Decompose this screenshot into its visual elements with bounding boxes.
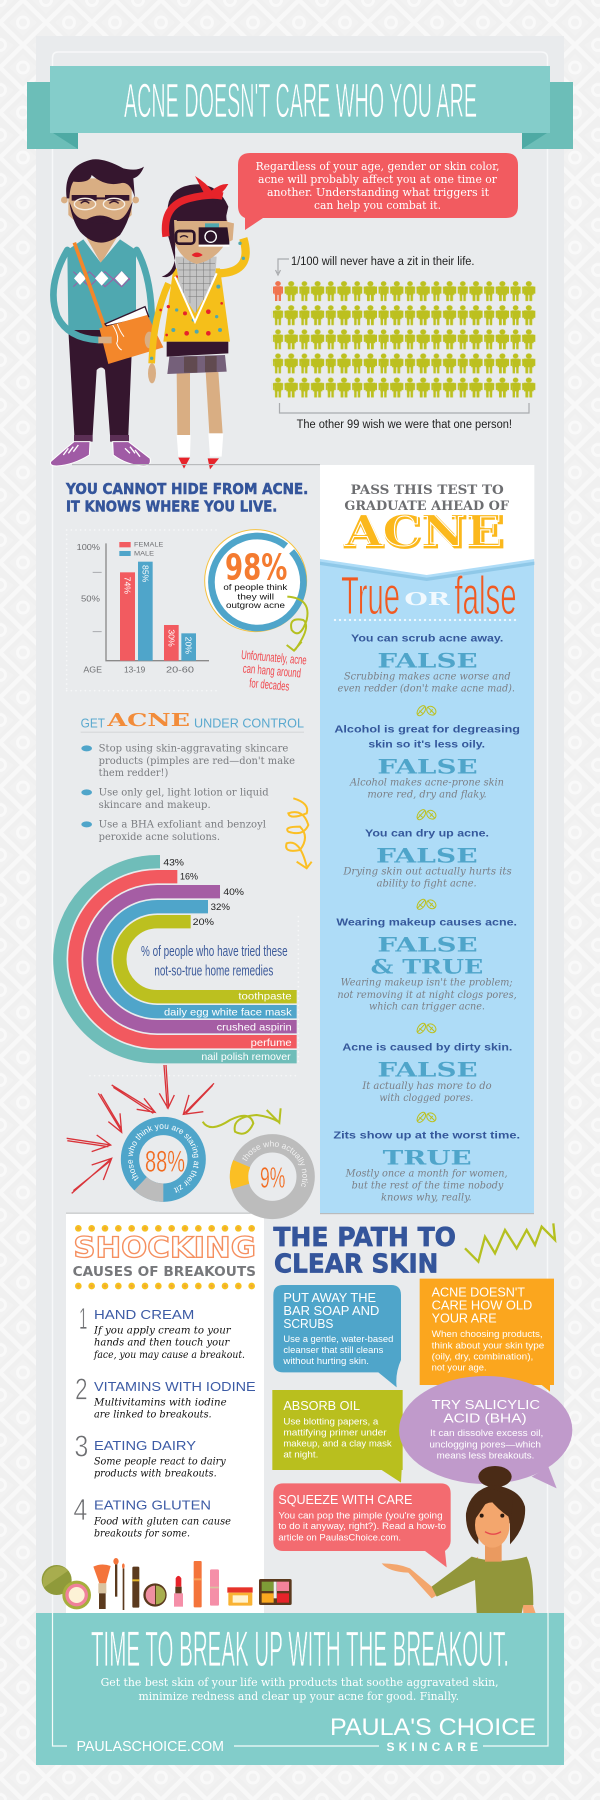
- quiz header: [320, 465, 534, 581]
- bar chart: 100%: [77, 542, 100, 552]
- tips list: them redder!): [99, 767, 168, 779]
- intro speech bubble: acne will probably affect you at one time or: [258, 173, 498, 186]
- tip: blue bubble: cleanser that still cleans: [283, 1345, 384, 1355]
- radial bar chart: [60, 862, 297, 1057]
- sketch arrows: [67, 1065, 214, 1193]
- causes list: breakouts for some.: [94, 1528, 190, 1540]
- heading: you cannot hide: [65, 481, 308, 515]
- handwritten note: [241, 648, 307, 694]
- quiz questions upper: false: [454, 567, 517, 626]
- bar chart: 85%: [140, 565, 150, 583]
- subheading: CAUSES OF BREAKOUTS: [73, 1265, 256, 1280]
- grid of 100 people: [271, 279, 535, 400]
- ribbon folds: [53, 133, 547, 149]
- heading: you cannot hide: IT KNOWS WHERE YOU LIVE.: [66, 498, 277, 515]
- footer text: minimize redness and clear up your acne for good. Finally.: [138, 1690, 459, 1703]
- 98% donut callout: 98%: [225, 547, 287, 588]
- quiz questions lower: Wearing makeup causes acne.: [336, 917, 517, 928]
- intro speech bubble: another. Understanding what triggers it: [267, 186, 490, 199]
- highlighted person: [272, 280, 284, 302]
- quiz questions upper: Scrubbing makes acne worse and: [344, 672, 511, 683]
- logo: PAULA'S CHOICE: [330, 1714, 536, 1741]
- chart labels: [164, 992, 293, 1063]
- tips list: Stop using skin-aggravating skincare: [99, 743, 288, 755]
- panel: true or false quiz: [320, 465, 534, 1214]
- quiz questions lower: FALSE: [376, 845, 478, 868]
- tip: blue bubble: without hurting skin.: [282, 1356, 369, 1366]
- tip: lime box: Use blotting papers, a: [283, 1416, 378, 1426]
- chart percentages: [163, 858, 244, 927]
- tip: orange box: ACNE DOESN'T: [432, 1285, 525, 1300]
- tips list: products (pimples are red—don't make: [99, 755, 295, 767]
- quiz questions lower: FALSE: [377, 934, 478, 957]
- tip: orange box: YOUR ARE: [432, 1311, 497, 1326]
- causes list: products with breakouts.: [94, 1468, 217, 1480]
- causes list: are linked to breakouts.: [94, 1409, 212, 1421]
- bar chart: MALE: [134, 551, 155, 558]
- 9% donut: [230, 1134, 315, 1220]
- tip: red bubble: You can pop the pimple (you're going: [278, 1510, 443, 1520]
- bracket: [280, 403, 529, 413]
- quiz questions lower: Drying skin out actually hurts its: [342, 867, 512, 878]
- bar chart: 20-60: [166, 665, 194, 675]
- logo: [330, 1714, 536, 1754]
- bar chart: 30%: [166, 629, 176, 647]
- tip: orange box: not your age.: [432, 1362, 487, 1372]
- pictogram caption top: 1/100 will never have a zit in their life.: [291, 256, 474, 268]
- chart labels: perfume: [251, 1038, 292, 1049]
- footer: [36, 1613, 564, 1765]
- left column upper: [65, 481, 312, 868]
- makeup illustration: [42, 1558, 292, 1610]
- causes list: Multivitamins with iodine: [93, 1397, 227, 1409]
- bar chart: [77, 542, 209, 675]
- woman presenting: [382, 1466, 536, 1613]
- pictogram caption bottom: The other 99 wish we were that one person!: [297, 419, 512, 431]
- chart caption: not-so-true home remedies: [154, 963, 273, 979]
- quiz questions lower: FALSE: [377, 1059, 478, 1082]
- causes list: hands and then touch your: [94, 1337, 230, 1349]
- quiz questions upper: Alcohol is great for degreasing: [334, 725, 520, 736]
- tips list: [81, 743, 295, 843]
- chart percentages: 40%: [223, 887, 244, 897]
- section divider: [72, 464, 320, 465]
- bar chart: 50%: [81, 594, 100, 604]
- 1 in 100 pictogram: [271, 256, 535, 431]
- chart percentages: 16%: [180, 872, 198, 882]
- heading: get acne under control: [81, 711, 304, 733]
- panel: shocking causes: [42, 1213, 292, 1614]
- chart percentages: 20%: [193, 917, 214, 927]
- chart labels: nail polish remover: [201, 1052, 291, 1063]
- shocking heading: SHOCKING: [73, 1230, 256, 1264]
- content panel: [36, 36, 564, 1614]
- quiz questions upper: You can scrub acne away.: [351, 634, 503, 645]
- quiz questions upper: True: [341, 567, 400, 626]
- chart labels: daily egg white face mask: [164, 1008, 293, 1019]
- tip: red bubble: to do it anyway, right?). Read a how-to: [278, 1521, 446, 1531]
- tips list: peroxide acne solutions.: [99, 831, 220, 843]
- url: PAULASCHOICE.COM: [76, 1738, 224, 1755]
- 9% donut: those who actually notice: [242, 1140, 308, 1187]
- title ribbon: [27, 66, 573, 149]
- handwritten note: for decades: [249, 676, 290, 694]
- chart labels: crushed aspirin: [217, 1023, 292, 1034]
- tip: red bubble: [273, 1483, 451, 1567]
- footer frame lines: [52, 1613, 548, 1746]
- panel: path to clear skin: [272, 1223, 572, 1613]
- tip: purple bubble: TRY SALICYLIC: [432, 1397, 540, 1412]
- man: [50, 159, 163, 466]
- tip: lime box: mattifying primer under: [283, 1427, 387, 1437]
- quiz header: GRADUATE AHEAD OF: [344, 498, 510, 514]
- yellow squiggle arrow: [286, 798, 312, 868]
- ribbon band: [50, 66, 550, 133]
- 98% donut callout: [205, 530, 307, 632]
- quiz questions lower: but the rest of the time nobody: [352, 1181, 504, 1192]
- 98% donut callout: of people think: [223, 582, 288, 592]
- chart percentages: 32%: [211, 902, 230, 912]
- heading: THE PATH TO: [273, 1223, 456, 1253]
- causes list: 4: [73, 1493, 87, 1527]
- chart caption: % of people who have tried these: [141, 944, 288, 960]
- tip: red bubble: SQUEEZE WITH CARE: [278, 1492, 413, 1507]
- causes list: Some people react to dairy: [94, 1455, 226, 1467]
- heading: get acne under control: GET: [81, 716, 105, 730]
- tip: orange box: CARE HOW OLD: [432, 1298, 532, 1313]
- tip: purple bubble: [399, 1376, 572, 1488]
- tip: purple bubble: means less breakouts.: [437, 1450, 534, 1460]
- causes list: EATING DAIRY: [94, 1438, 196, 1453]
- bar chart: 13-19: [124, 665, 146, 675]
- footer band: [36, 1613, 564, 1765]
- quiz header: ACNE: [344, 507, 505, 558]
- causes list: EATING GLUTEN: [94, 1498, 211, 1513]
- quiz questions upper: skin so it's less oily.: [368, 739, 485, 750]
- quiz questions lower: Zits show up at the worst time.: [333, 1130, 520, 1141]
- green swirl arrow: [287, 597, 308, 651]
- tip: orange box: [420, 1279, 554, 1392]
- handwritten note: Unfortunately, acne: [241, 648, 307, 668]
- chart percentages: 43%: [163, 858, 184, 868]
- quiz questions lower: TRUE: [383, 1147, 472, 1170]
- quiz questions upper: more red, dry and flaky.: [367, 790, 487, 801]
- quiz questions lower: ability to fight acne.: [377, 879, 477, 890]
- tip: purple bubble: ACID (BHA): [443, 1410, 527, 1425]
- bar chart: 74%: [122, 577, 132, 594]
- quiz questions upper: OR: [404, 589, 452, 610]
- tips list: skincare and makeup.: [99, 799, 211, 811]
- intro speech bubble: [238, 153, 518, 230]
- quiz questions lower: Mostly once a month for women,: [345, 1169, 508, 1180]
- handwritten note: can hang around: [242, 661, 302, 681]
- quiz questions lower: Wearing makeup isn't the problem;: [341, 978, 513, 989]
- chart labels: toothpaste: [238, 992, 292, 1003]
- heading: you cannot hide: YOU CANNOT HIDE FROM ACNE.: [65, 481, 308, 498]
- quiz questions lower: knows why, really.: [381, 1193, 472, 1204]
- tip: orange box: When choosing products,: [432, 1329, 543, 1339]
- quiz questions upper: FALSE: [377, 755, 478, 778]
- causes list: 1: [79, 1302, 87, 1336]
- heading: CLEAR SKIN: [274, 1250, 438, 1280]
- quiz questions upper: [334, 567, 520, 840]
- causes list: 2: [75, 1372, 88, 1406]
- tip: purple bubble: unclogging pores—which: [429, 1439, 541, 1449]
- 88% donut: 88%: [145, 1146, 185, 1179]
- quiz questions upper: FALSE: [377, 649, 478, 672]
- pointer arrow: [276, 259, 289, 275]
- inner white frame: [52, 52, 548, 1614]
- 88% donut: those who think you are staring at their zit: [128, 1124, 198, 1193]
- quiz questions lower: [333, 845, 520, 1204]
- tips list: Use a BHA exfoliant and benzoyl: [99, 819, 266, 831]
- tip: lime box: makeup, and a clay mask: [283, 1438, 392, 1448]
- donuts: perception versus reality: [120, 1116, 315, 1220]
- 98% donut callout: outgrow acne: [226, 600, 285, 610]
- lemon dot rows: [78, 1228, 253, 1286]
- heading: get acne under control: UNDER CONTROL: [194, 716, 304, 730]
- dotted frame: [90, 917, 300, 1076]
- bar chart: 20%: [184, 637, 194, 654]
- quiz questions lower: & TRUE: [371, 955, 483, 978]
- intro speech bubble: Regardless of your age, gender or skin color,: [256, 160, 500, 173]
- logo: SKINCARE: [386, 1740, 478, 1754]
- causes list: face, you may cause a breakout.: [93, 1349, 245, 1361]
- tip: blue bubble: SCRUBS: [283, 1316, 334, 1331]
- causes list: 3: [74, 1430, 88, 1464]
- tips list: Use only gel, light lotion or liquid: [99, 787, 269, 799]
- 9% donut: 9%: [260, 1162, 285, 1194]
- heading: [273, 1223, 456, 1280]
- quiz questions upper: even redder (don't make acne mad).: [338, 684, 515, 695]
- tip: red bubble: article on PaulasChoice.com.: [278, 1532, 401, 1542]
- 98% donut callout: they will: [237, 591, 274, 601]
- tip: lime box: at night.: [283, 1449, 318, 1459]
- tip: purple bubble: It can dissolve excess oil,: [430, 1428, 543, 1438]
- causes list: VITAMINS WITH IODINE: [94, 1379, 256, 1394]
- quiz header: PASS THIS TEST TO: [351, 482, 504, 498]
- lime zigzag: [465, 1223, 555, 1262]
- causes list: [73, 1302, 256, 1540]
- tip: blue bubble: [273, 1285, 401, 1387]
- heading: get acne under control: ACNE: [106, 711, 190, 731]
- quiz questions lower: with clogged pores.: [379, 1093, 473, 1104]
- dotted frame: [67, 530, 220, 691]
- tip: orange box: (oily, dry, combination),: [432, 1351, 533, 1361]
- footer text: [101, 1676, 499, 1703]
- chart caption: [141, 944, 288, 979]
- lime swirl arrow: [203, 1108, 281, 1134]
- left column lower: [60, 858, 300, 1193]
- causes list: If you apply cream to your: [93, 1325, 232, 1337]
- quiz questions lower: not removing it at night clogs pores,: [337, 990, 517, 1001]
- ribbon tails: [27, 82, 573, 149]
- footer text: Get the best skin of your life with products that soothe aggravated skin,: [101, 1676, 499, 1689]
- bar chart: AGE: [83, 665, 102, 675]
- intro speech bubble: can help you combat it.: [314, 199, 441, 212]
- tip: blue bubble: PUT AWAY THE: [283, 1290, 376, 1305]
- quiz questions lower: It actually has more to do: [361, 1081, 492, 1092]
- causes list: Food with gluten can cause: [93, 1516, 231, 1528]
- tip: blue bubble: Use a gentle, water-based: [283, 1334, 393, 1344]
- quiz header: ACNE: [344, 505, 502, 556]
- tip: lime box: [272, 1390, 403, 1483]
- characters: hipster man and woman: [50, 159, 246, 469]
- woman with camera: [148, 176, 246, 469]
- quiz questions upper: Alcohol makes acne-prone skin: [349, 778, 504, 789]
- tip: lime box: ABSORB OIL: [283, 1398, 360, 1413]
- tip: orange box: think about your skin type: [432, 1340, 544, 1350]
- quiz questions lower: Acne is caused by dirty skin.: [342, 1043, 512, 1054]
- quiz blue background: [320, 550, 534, 1213]
- tip: blue bubble: BAR SOAP AND: [283, 1303, 379, 1318]
- bar chart: FEMALE: [134, 542, 164, 549]
- quiz questions upper: You can dry up acne.: [365, 829, 489, 840]
- causes list: HAND CREAM: [94, 1307, 194, 1322]
- quiz questions lower: which can trigger acne.: [369, 1002, 485, 1013]
